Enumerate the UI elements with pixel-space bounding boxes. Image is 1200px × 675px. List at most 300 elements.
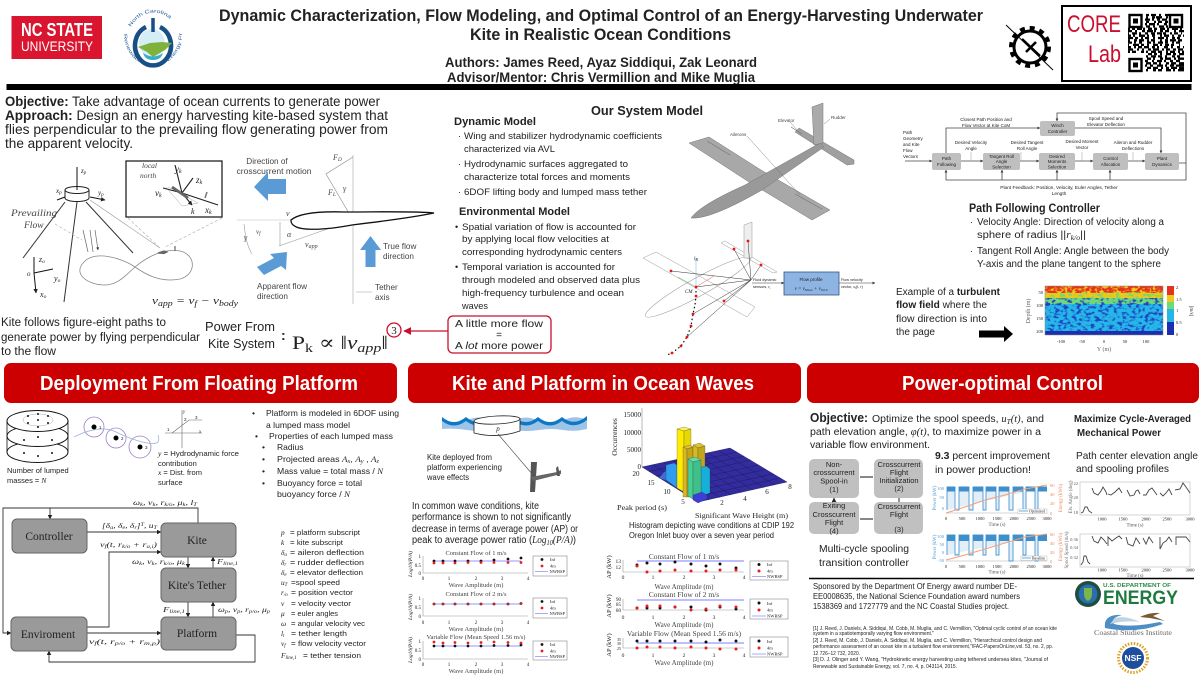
legend: 4m	[767, 646, 773, 650]
diagram: kite figure-eight path: p	[58, 191, 62, 196]
lumped mass bullets: A	[370, 454, 377, 464]
objective text: Optimize the spool speeds, u	[872, 414, 1006, 425]
equation: apparent velocity: − v	[197, 295, 219, 307]
chart: average power, constant 2 m/s: 90	[616, 598, 622, 603]
chart: peak to average, variable flow: 4	[527, 663, 530, 668]
diagram: kite under wave platform	[442, 415, 587, 492]
connectors	[905, 113, 1186, 180]
controller bullets: Velocity Angle: Direction of velocity along a	[977, 217, 1164, 228]
inset: local kite frame: local	[142, 161, 157, 170]
chart: peak to average, variable flow: 0	[422, 663, 425, 668]
label: apparent flow direction: Apparent flow	[257, 282, 307, 291]
legend: 4m	[767, 608, 773, 612]
chart: elevation angle: Time (s)	[1127, 524, 1144, 528]
objective and approach text: the apparent velocity.	[5, 136, 133, 151]
signal labels: + r	[130, 540, 147, 549]
signal labels: p	[266, 610, 271, 615]
symbol legend: = tether tension	[303, 651, 361, 660]
figure-eight path	[80, 250, 192, 285]
equation: kite power: 3	[391, 325, 397, 337]
chart: peak to average, constant 2 m/s: 3	[501, 621, 504, 626]
block text: Desired Moment	[1065, 139, 1099, 144]
CORE Lab and QR code box	[1062, 6, 1191, 81]
inset: local kite frame: k	[209, 210, 212, 216]
chart: peak to average, constant 1 m/s: Log10(P/A)	[407, 551, 414, 578]
chart: elevation angle	[1069, 480, 1195, 528]
CORE Lab and QR code box: Lab	[1088, 41, 1121, 68]
chart: average power, variable flow: 3	[713, 653, 716, 659]
equation: apparent velocity: body	[219, 299, 239, 308]
symbol legend: = euler angles	[291, 609, 338, 618]
symbol legend: r	[281, 588, 284, 597]
equation: kite power	[205, 319, 401, 355]
legend: NWBSP	[767, 652, 783, 656]
chart: baseline power: 0	[1050, 559, 1053, 564]
dynamic model text: ·	[458, 131, 461, 141]
label: crosscurrent motion: Direction of	[246, 157, 288, 166]
environmental model text: •	[455, 262, 458, 272]
block: platform: Platform	[177, 628, 217, 640]
equation: kite power: k	[305, 340, 314, 355]
logo: North Carolina Renewable Ocean Energy Program: North Carolina	[128, 10, 171, 26]
chart: baseline power: 100	[937, 534, 945, 539]
symbol legend: l	[281, 629, 283, 638]
chart: peak to average, constant 1 m/s: 0	[418, 572, 422, 577]
inset: local kite frame: k	[191, 207, 195, 216]
signal labels: k	[183, 503, 187, 508]
symbol legend: e	[284, 573, 287, 578]
signal labels: k/o	[164, 562, 173, 567]
legend: Inf	[550, 642, 556, 647]
chart: peak to average, variable flow: Variable Flow (Mean Speed 1.56 m/s)	[427, 634, 525, 641]
legend: Inf	[767, 601, 773, 606]
text: common wave conditions: )	[573, 535, 576, 546]
chart: baseline power: -50	[938, 558, 945, 563]
dynamic model text: Hydrodynamic surfaces aggregated to	[464, 159, 628, 170]
environmental model text: corresponding hydrodynamic centers	[462, 247, 622, 258]
signal labels: , δ	[125, 521, 135, 530]
chart: baseline power: Power (kW)	[933, 534, 938, 559]
state 3: Flight	[890, 510, 909, 519]
heading banner	[807, 363, 1199, 403]
signal labels: p/o	[113, 642, 126, 647]
chart: optimized power: Time (s)	[989, 523, 1006, 528]
chart: average power, constant 2 m/s: AP (kW)	[606, 594, 613, 618]
block text: Allocation	[1101, 162, 1121, 167]
legend	[750, 637, 788, 657]
symbol legend: F	[281, 651, 285, 660]
sponsor text: Sponsored by the Department Of Energy award number DE-	[813, 581, 1017, 591]
diagram: fluid dynamic sensor points: sensors, r	[753, 285, 770, 289]
caption: figure-eight: to the flow	[1, 346, 57, 358]
environmental model text: •	[455, 222, 458, 232]
caption: kite deployed: Kite deployed from	[427, 453, 492, 462]
equation: kite power: Kite System	[208, 336, 275, 351]
colorbar: [m/s]	[1188, 306, 1193, 317]
chart: elevation angle: 1500	[1118, 516, 1128, 522]
text: common wave conditions: 10	[546, 539, 553, 547]
signal labels: , μ	[257, 605, 267, 614]
state 4: Crosscurrent	[813, 510, 856, 519]
block text: Closest Path Position and	[960, 117, 1012, 122]
caption: histogram: Histogram depicting wave conditions at CDIP 192	[629, 520, 794, 530]
symbol legend: /o	[283, 593, 288, 598]
logo: US Department of Energy: U.S. DEPARTMENT OF	[1103, 583, 1171, 589]
chart: average power, constant 2 m/s: Constant Flow of 2 m/s	[649, 590, 719, 599]
environmental model text: waves	[461, 301, 488, 312]
block text: Length	[1052, 191, 1067, 197]
equation: kite power: ∝ ‖	[313, 333, 347, 354]
turbulent flow caption: flow direction is into	[896, 314, 987, 325]
lumped mass bullets: •	[252, 408, 255, 418]
caption: histogram	[629, 520, 794, 540]
symbol legend: f	[284, 644, 286, 649]
chart: peak to average, variable flow: 1	[418, 640, 422, 645]
axes: o	[27, 270, 31, 278]
label: tether axis	[356, 283, 398, 302]
dynamic model text: Wing and stabilizer hydrodynamic coefficients	[464, 131, 662, 142]
signal labels: , r	[240, 605, 249, 614]
bars	[659, 427, 710, 503]
chart: elevation angle: 1000	[1098, 516, 1107, 522]
flow chart: spooling transition states	[809, 459, 923, 536]
text: force axes: contribution	[158, 459, 197, 468]
chart: average power, variable flow: 4	[743, 653, 746, 659]
chart: optimized power: 1000	[976, 516, 985, 521]
diagram: force contribution plot: 2	[184, 417, 187, 422]
label: true flow direction: direction	[383, 252, 414, 261]
chart: optimized power	[933, 483, 1064, 528]
signal labels: )	[152, 540, 158, 549]
controller bullets: sphere of radius || r	[977, 230, 1070, 241]
text: force axes: x = Dist. from	[157, 468, 202, 477]
block text: Angle	[965, 146, 977, 151]
chart: optimized power: Energy (kWh)	[1059, 483, 1064, 512]
chart: peak to average, constant 2 m/s: 0.5	[415, 606, 422, 611]
chart: peak to average, variable flow: Wave Amplitude (m)	[449, 668, 503, 675]
chart: optimized power: Optimized	[1029, 510, 1045, 514]
label: prevailing flow	[10, 209, 57, 231]
colorbar: 1.5	[1176, 297, 1182, 302]
symbol legend	[280, 528, 367, 661]
objective text: T	[1007, 418, 1012, 426]
text: profiles: Path center elevation angle	[1076, 450, 1198, 462]
environmental model text: Temporal variation is accounted for	[462, 262, 615, 273]
block diagram: system loop	[3, 498, 271, 662]
chart: spool speed: 1500	[1118, 568, 1128, 572]
symbol legend: δ	[281, 568, 284, 577]
chart: optimized power: 2500	[1026, 516, 1036, 521]
chart: optimized power: 0	[1050, 511, 1053, 516]
chart: peak to average, constant 1 m/s: 0.5	[415, 564, 422, 569]
logo: North Carolina Renewable Ocean Energy Program	[124, 10, 182, 68]
diagram: fluid dynamic sensor points	[641, 222, 875, 355]
axis tick labels: Occurrences	[610, 418, 619, 456]
chart: optimized power: 0	[942, 506, 945, 511]
state 4: (4)	[829, 526, 839, 536]
symbol legend: = tether length	[291, 629, 347, 638]
chart: optimized power: 2000	[1010, 516, 1019, 521]
symbol legend: = velocity vector	[291, 599, 352, 608]
inset: local kite frame	[126, 161, 222, 217]
chart: baseline power: Energy (kWh)	[1059, 532, 1064, 561]
state 3: (3)	[894, 525, 904, 534]
signal labels: , v	[142, 557, 153, 566]
diagram: airfoil force vectors: γ	[343, 184, 347, 193]
heading banner: Deployment From Floating Platform	[40, 373, 358, 395]
chart: peak to average, constant 1 m/s: 2	[475, 577, 478, 582]
references: [2] J. Reed, M. Cobb, J. Daniels, A. Siddiqui, M. Muglia, and C. Vermillion, "Hierarchical control design and	[813, 638, 1042, 644]
flow profile box: + v	[813, 287, 822, 292]
chart: peak to average, constant 1 m/s: 4	[527, 577, 530, 582]
signal labels: )	[154, 637, 161, 646]
legend: Inf	[550, 557, 556, 562]
chart: average power, constant 2 m/s: Wave Amplitude (m)	[655, 621, 714, 629]
arrow: to flow field	[979, 326, 1013, 342]
text: force axes	[157, 449, 239, 487]
block text: Following	[937, 162, 956, 167]
axis tick labels: 0	[638, 463, 642, 471]
chart: spool speed: 2000	[1142, 568, 1151, 572]
turbulent flow caption: Example of a turbulent	[896, 287, 1001, 298]
heading: Our System Model	[591, 103, 703, 118]
legend	[533, 598, 567, 618]
lumped mass bullets: •	[262, 442, 265, 452]
text: profiles	[1076, 450, 1198, 475]
chart: average power, constant 1 m/s: 2	[683, 575, 686, 581]
symbol legend: = position vector	[291, 588, 354, 597]
logo: US Department of Energy: ENERGY	[1103, 588, 1178, 609]
signal labels: F	[163, 605, 168, 614]
colorbar: 2	[1176, 285, 1178, 290]
symbol legend: =spool speed	[291, 578, 340, 587]
diagram: force contribution plot: y	[182, 410, 186, 415]
block text: Aileron and Rudder	[1114, 140, 1153, 145]
panel: path following controller	[896, 113, 1193, 353]
symbol legend: μ	[281, 609, 285, 618]
signal labels: k	[182, 562, 186, 567]
logo: US Department of Energy	[1075, 581, 1178, 609]
inset: local kite frame: y	[175, 164, 179, 174]
turbulent flow caption: flow field where the	[896, 300, 987, 311]
controller bullets: k/o	[1071, 234, 1081, 242]
chart: optimized power: 100	[937, 486, 945, 491]
block text: Tangent Roll	[989, 154, 1014, 159]
controller bullets: ·	[970, 246, 973, 256]
signal labels: , v	[228, 605, 238, 614]
lumped mass bullets: a lumped mass model	[266, 420, 350, 430]
dynamic model text: ·	[458, 187, 461, 197]
chart: peak to average, constant 1 m/s	[407, 550, 567, 589]
signal labels: k/o	[122, 545, 131, 550]
diagram: kite figure-eight path: z	[81, 167, 84, 175]
chart: baseline power: 500	[959, 564, 966, 569]
chart: spool speed: 1000	[1098, 568, 1107, 572]
diagram: airfoil force vectors: F	[328, 188, 333, 197]
symbol legend: t	[283, 634, 285, 639]
chart: spool speed: 0.32	[1070, 555, 1078, 560]
flow profile box: Turb	[821, 288, 828, 292]
colorbar	[1167, 285, 1193, 337]
chart: average power, variable flow: 30	[617, 641, 621, 646]
block text: Dynamics	[1152, 162, 1173, 167]
axes: o	[42, 259, 45, 265]
turbulent flow caption	[896, 287, 1001, 338]
signal labels: f	[94, 642, 98, 647]
chart: elevation angle: 2500	[1162, 516, 1172, 522]
legend: NWBSP	[550, 569, 566, 574]
state 1: crosscurrent	[813, 468, 856, 477]
diagram: 3D kite model: Rudder	[831, 115, 846, 120]
axis tick labels: 15	[648, 479, 655, 487]
signal labels: r	[134, 526, 137, 531]
axis tick labels: Significant Wave Height (m)	[695, 511, 789, 520]
symbol legend: v	[281, 639, 284, 648]
chart: baseline power: 60	[1050, 532, 1055, 537]
text: force axes: surface	[158, 478, 183, 487]
diagram: fluid dynamic sensor points: i	[770, 286, 771, 290]
chart: baseline power: 40	[1050, 541, 1055, 546]
chart: average power, constant 1 m/s: 13	[616, 559, 621, 565]
label: apparent flow direction: direction	[257, 292, 288, 301]
state 3	[874, 502, 923, 534]
signal labels: , r	[155, 557, 164, 566]
legend: Inf	[767, 639, 773, 644]
label: crosscurrent motion	[236, 157, 312, 176]
block text: Plant	[1157, 156, 1168, 161]
diagram: fluid dynamic sensor points: vector, v	[841, 285, 855, 289]
axis tick labels: 10000	[624, 429, 642, 437]
dynamic model text: characterize total forces and moments	[464, 172, 630, 183]
environmental model text: Spatial variation of flow is accounted for	[462, 222, 636, 233]
label: prevailing flow: Flow	[23, 221, 44, 231]
signal labels: e	[122, 526, 126, 531]
axes: o	[44, 294, 47, 300]
signal labels: p	[224, 610, 229, 615]
state 2: Initialization	[879, 476, 919, 485]
panel: kite and platform in ocean waves	[407, 363, 801, 675]
chart: average power, constant 1 m/s: Constant Flow of 1 m/s	[649, 552, 719, 561]
references: 12 726–12 732, 2020.	[813, 651, 860, 657]
chart: optimized power: 20	[1050, 501, 1055, 506]
caption: number of lumped masses: masses = N	[7, 476, 47, 485]
block text: and Kite	[903, 142, 920, 147]
block text: Selection	[1048, 164, 1067, 170]
diagram: airfoil force vectors: D	[337, 157, 342, 163]
chart: average power, constant 1 m/s: 12	[616, 565, 621, 571]
chart: average power, constant 2 m/s: 1	[652, 615, 655, 621]
lumped mass bullets: •	[255, 431, 258, 441]
legend: 4m	[550, 564, 556, 568]
block text: Desired Velocity	[955, 140, 988, 145]
environmental model text	[455, 206, 640, 312]
chart: average power, constant 1 m/s: 4	[743, 575, 746, 581]
chart: peak to average, constant 1 m/s: 0	[422, 577, 425, 582]
chart: average power, variable flow: 0	[622, 653, 625, 659]
diagram: lumped mass disks	[7, 410, 69, 485]
chart: average power, constant 2 m/s: 2	[683, 615, 686, 621]
chart: baseline power: 2000	[1010, 564, 1019, 569]
axes	[27, 255, 61, 300]
diagram: mass spheres along flow: 3	[145, 445, 148, 450]
environmental model text: by applying local flow velocities at	[462, 234, 609, 245]
objective and approach text	[5, 94, 388, 151]
chart: spool speed: 0.34	[1070, 545, 1079, 550]
chart: baseline power: 0	[942, 550, 945, 555]
chart: baseline power: 20	[1050, 550, 1055, 555]
symbol legend: = kite subscript	[290, 538, 343, 547]
chart: baseline power: 50	[940, 542, 945, 547]
legend	[533, 641, 567, 660]
caption: figure-eight	[1, 317, 200, 358]
dynamic model text	[454, 116, 662, 198]
inset: local kite frame: x	[205, 205, 209, 215]
controller bullets: ·	[970, 217, 973, 227]
chart: turbulent flow field heatmap: 150	[1036, 316, 1044, 321]
objective text: variable flow environment.	[810, 440, 930, 451]
chart: peak to average, variable flow: 2	[475, 663, 478, 668]
block text: Roll Angle	[1017, 146, 1038, 151]
lumped mass bullets: x	[346, 459, 351, 465]
objective text: , and	[1021, 414, 1043, 425]
text: common wave conditions: decrease in terms of average power (AP) or	[412, 524, 579, 535]
callout: more flow more power: A lot more power	[455, 340, 544, 352]
chart: baseline power: 1500	[992, 564, 1002, 569]
chart: optimized power: 40	[1050, 492, 1055, 497]
chart: elevation angle: 22	[1074, 481, 1078, 486]
chart: baseline power: 2500	[1026, 564, 1036, 569]
chart: baseline power: Baseline	[1032, 556, 1045, 560]
legend	[533, 556, 567, 576]
turbulent flow caption: the page	[896, 327, 935, 338]
chart: turbulent flow field heatmap	[1025, 285, 1193, 353]
diagram: fluid dynamic sensor points: (t, r)	[856, 285, 864, 289]
axes: o	[58, 278, 61, 284]
chart: average power, constant 1 m/s: AP (kW)	[606, 555, 613, 579]
logo: NC State University: NC STATE	[21, 20, 93, 40]
block text: Flow Vector at Kite CoM	[962, 123, 1010, 128]
arrow: apparent flow	[257, 252, 287, 275]
block text: Geometry	[903, 136, 924, 141]
diagram: mass spheres along flow	[74, 417, 159, 458]
chart: optimized power: Power (kW)	[933, 485, 938, 510]
diagram: fluid dynamic sensor points: l	[694, 257, 695, 262]
chart: optimized power: 1500	[992, 516, 1002, 521]
legend: 4m	[550, 648, 556, 654]
chart: turbulent flow field heatmap: 100	[1036, 303, 1044, 308]
chart: spool speed: 0.36	[1070, 537, 1079, 542]
panel: our system model	[454, 103, 875, 355]
title: Kite in Realistic Ocean Conditions	[470, 25, 731, 44]
caption: kite deployed: wave effects	[426, 473, 469, 482]
chart: average power, variable flow: Variable Flow (Mean Speed 1.56 m/s)	[627, 629, 742, 638]
signal labels: p	[236, 610, 241, 615]
objective and approach text: Approach: Design an energy harvesting kite-based system that	[5, 108, 388, 123]
signal labels: a,i	[146, 545, 154, 550]
legend	[750, 599, 788, 619]
chart: peak to average, variable flow: 0.5	[415, 649, 422, 654]
state 1: Spool-in	[820, 476, 848, 486]
equation: apparent velocity: v	[152, 295, 157, 307]
signal labels: v	[100, 540, 103, 549]
chart: peak to average, constant 1 m/s: 3	[501, 577, 504, 582]
axis tick labels: 2	[720, 499, 724, 507]
signal labels: , μ	[173, 498, 183, 507]
chart: optimized power: 60	[1050, 483, 1055, 488]
airfoil	[291, 212, 434, 229]
chart: average power, variable flow: AP (kW)	[606, 633, 613, 657]
chart: peak to average, constant 2 m/s: Log10(P/A)	[407, 594, 414, 621]
